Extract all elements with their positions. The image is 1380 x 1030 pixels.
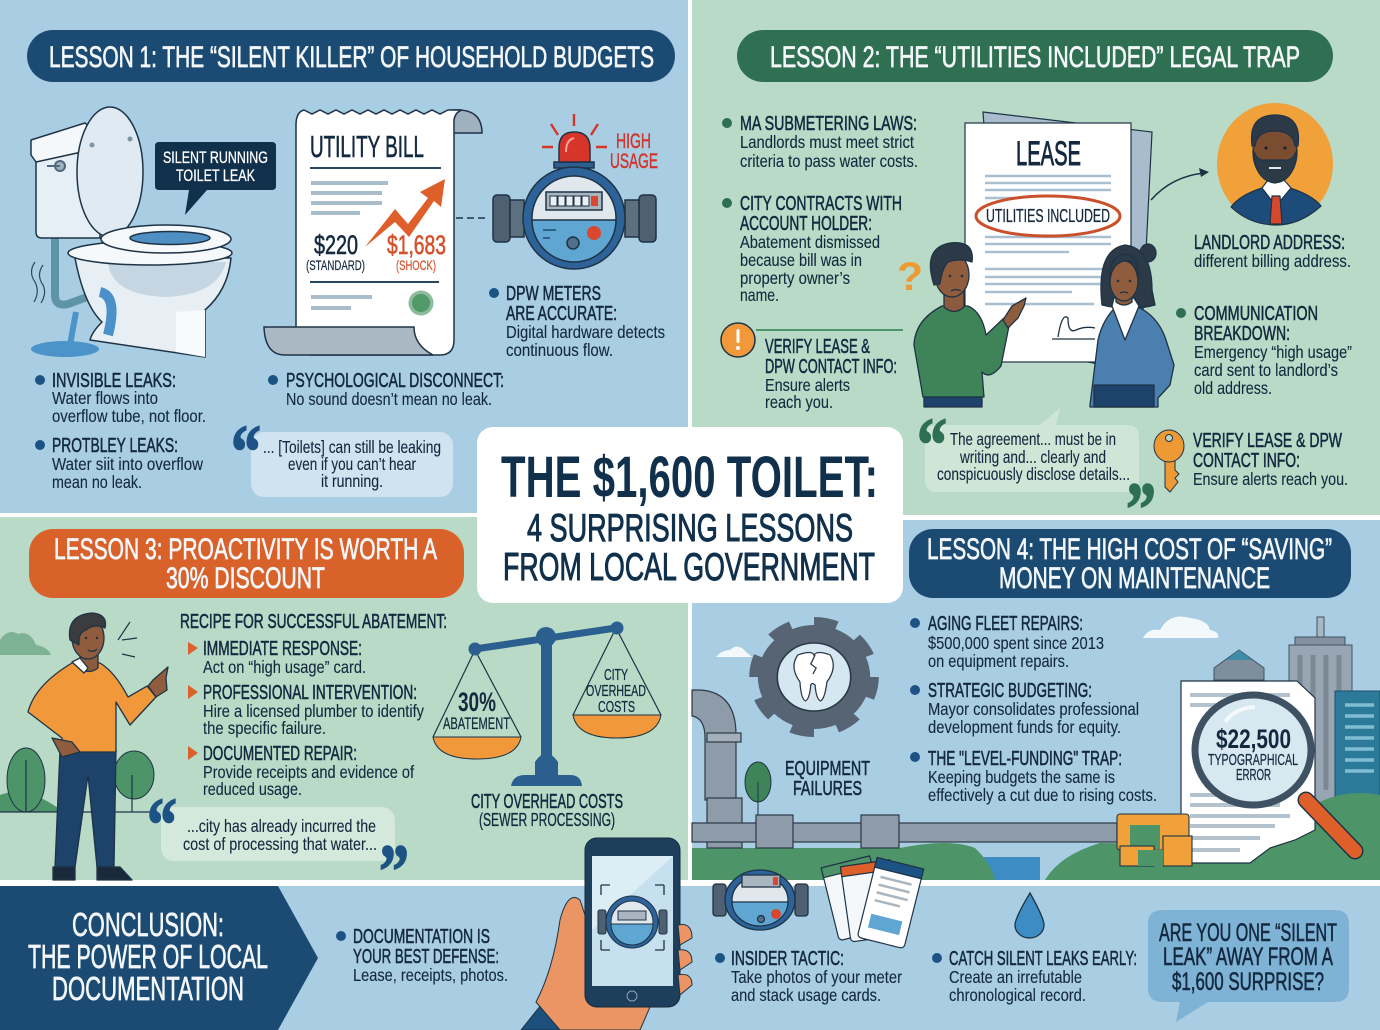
quote: agreement: “ [917, 403, 947, 487]
text: DPW meters: DPW METERS [506, 282, 601, 305]
icon: green seal [408, 290, 434, 316]
shock bill amount: $1,683 [387, 230, 446, 260]
text: strategic budgeting [910, 679, 1139, 737]
icon: woman in blue [1090, 244, 1174, 407]
title card [477, 427, 903, 603]
icon: question mark: ? [897, 255, 923, 299]
label: equipment failures [785, 757, 870, 800]
magnifier text: ERROR [1236, 767, 1271, 784]
text: catch silent leaks: chronological record. [949, 985, 1086, 1005]
text: verify lease left: Ensure alerts [765, 375, 850, 395]
lease title: LEASE [1016, 135, 1081, 173]
icon: water meter with alarm [493, 114, 656, 269]
text: documentation is your best defense [336, 925, 508, 985]
label: equipment failures: FAILURES [793, 777, 862, 800]
shock label: (SHOCK) [396, 257, 436, 273]
text: communication breakdown: old address. [1194, 378, 1272, 398]
text: documented repair: DOCUMENTED REPAIR: [203, 742, 357, 765]
standard label: (STANDARD) [306, 257, 365, 273]
subtitle: 4 SURPRISING LESSONS [527, 507, 853, 550]
quote: agreement: The agreement... must be in [950, 429, 1116, 449]
panel: lesson 1 [0, 0, 688, 513]
text: city contracts: Abatement dismissed [740, 232, 880, 252]
text: city contracts: name. [740, 285, 779, 305]
text: MA submetering laws: Landlords must meet strict [740, 132, 914, 152]
text: DPW meters: ARE ACCURATE: [506, 302, 617, 325]
text: aging fleet repairs: AGING FLEET REPAIRS: [928, 612, 1083, 635]
main title: THE $1,600 TOILET: [501, 445, 878, 510]
lesson 3 heading: 30% DISCOUNT [166, 562, 325, 595]
text: landlord address: different billing address. [1194, 251, 1351, 271]
text: strategic budgeting: STRATEGIC BUDGETING: [928, 679, 1092, 702]
highlighted clause: UTILITIES INCLUDED [986, 206, 1110, 226]
text: level funding trap: Keeping budgets the same is [928, 767, 1115, 787]
text: insider tactic: Take photos of your meter [731, 967, 902, 987]
icon: hand holding phone [521, 838, 692, 1030]
text: city contracts: CITY CONTRACTS WITH [740, 192, 902, 215]
conclusion banner: DOCUMENTATION [52, 970, 244, 1007]
text: communication breakdown: BREAKDOWN: [1194, 322, 1290, 345]
arrow: rising bill [365, 179, 445, 247]
panel: lesson 4 [692, 520, 1380, 880]
text: documented repair: reduced usage. [203, 779, 302, 799]
high usage label: HIGH [616, 130, 651, 153]
text: level funding trap: effectively a cut due to rising costs. [928, 785, 1157, 805]
text: communication breakdown: COMMUNICATION [1194, 302, 1318, 325]
subtitle: FROM LOCAL GOVERNMENT [503, 546, 875, 589]
text: verify lease left [765, 335, 897, 412]
icon: leaking toilet [31, 107, 232, 357]
label: equipment failures: EQUIPMENT [785, 757, 870, 780]
panel: lesson 2 [692, 0, 1380, 552]
text: catch silent leaks: Create an irrefutable [949, 967, 1082, 987]
scale label: city overhead [586, 667, 646, 716]
callout: are you one silent leak away [1148, 910, 1349, 1022]
quote: agreement: conspicuously disclose details... [937, 464, 1130, 484]
text: city contracts [722, 192, 902, 305]
text: verify lease left: VERIFY LEASE & [765, 335, 870, 358]
callout: silent running toilet leak: TOILET LEAK [176, 166, 255, 185]
quote: agreement: ” [1126, 468, 1156, 552]
scale label: city overhead: COSTS [598, 699, 635, 716]
text: invisible leaks: Water flows into [52, 388, 158, 408]
text: city contracts: because bill was in [740, 250, 862, 270]
text: professional intervention: Hire a licensed plumber to identify [203, 701, 424, 721]
text: strategic budgeting: development funds for equity. [928, 717, 1121, 737]
text: DPW meters: continuous flow. [506, 340, 613, 360]
lesson 4 heading: MONEY ON MAINTENANCE [999, 562, 1270, 595]
lesson 1 heading: LESSON 1: THE “SILENT KILLER” OF HOUSEHOLD BUDGETS [49, 41, 654, 74]
quote: toilets leaking: it running. [321, 471, 383, 491]
conclusion banner [0, 886, 318, 1030]
panel: conclusion strip [0, 838, 1380, 1030]
scale label: city overhead: OVERHEAD [586, 683, 646, 700]
icon: utility bill [264, 110, 482, 355]
quote: toilets leaking: even if you can’t hear [288, 454, 416, 474]
text: aging fleet repairs [910, 612, 1104, 671]
panel: lesson 3 [0, 517, 688, 914]
icon: landlord portrait [1217, 103, 1333, 225]
text: immediate response [188, 637, 366, 677]
magnifier text: TYPOGRAPHICAL [1208, 752, 1298, 769]
lesson 3 heading: LESSON 3: PROACTIVITY IS WORTH A [54, 533, 437, 566]
text: city overhead costs: (SEWER PROCESSING) [479, 810, 615, 830]
text: aging fleet repairs: $500,000 spent since 2013 [928, 633, 1104, 653]
text: documentation is your best defense: YOUR BEST DEFENSE: [353, 945, 499, 968]
callout: silent running toilet leak: SILENT RUNNING [163, 148, 268, 167]
text: MA submetering laws: MA SUBMETERING LAWS: [740, 112, 917, 135]
conclusion banner: THE POWER OF LOCAL [28, 938, 268, 975]
text: insider tactic: and stack usage cards. [731, 985, 881, 1005]
lesson 3 heading [29, 529, 464, 598]
text: protbley leaks [35, 434, 203, 492]
scale label: abatement [443, 687, 510, 733]
icon: pipes [692, 690, 1117, 848]
quote: toilets leaking: “ [231, 410, 261, 494]
text: verify lease right: Ensure alerts reach you. [1193, 469, 1348, 489]
lesson 4 heading [909, 529, 1351, 598]
text: psychological disconnect: No sound doesn’t mean no leak. [286, 389, 492, 409]
scenery: trees and cloud [0, 632, 154, 812]
scenery: clouds, city and landscape [692, 616, 1380, 880]
text: communication breakdown: card sent to landlord’s [1194, 360, 1338, 380]
scale label: abatement: ABATEMENT [443, 714, 510, 733]
text: psychological disconnect [268, 369, 504, 409]
text: documentation is your best defense: Lease, receipts, photos. [353, 965, 508, 985]
text: DPW meters: Digital hardware detects [506, 322, 665, 342]
icon: water drop [1015, 893, 1044, 938]
text: insider tactic [715, 947, 902, 1005]
text: immediate response: IMMEDIATE RESPONSE: [203, 637, 362, 660]
lesson 2 heading [737, 30, 1333, 82]
text: communication breakdown: Emergency “high usage” [1194, 342, 1352, 362]
text: catch silent leaks [932, 947, 1137, 1005]
text: MA submetering laws [722, 112, 918, 171]
text: city overhead costs [471, 790, 623, 830]
conclusion banner: CONCLUSION: [72, 906, 224, 943]
text: verify lease right [1193, 429, 1348, 489]
text: verify lease left: reach you. [765, 392, 833, 412]
text: documented repair [188, 742, 414, 799]
text: city contracts: property owner’s [740, 268, 850, 288]
text: landlord address [1194, 231, 1351, 271]
text: verify lease left: DPW CONTACT INFO: [765, 355, 897, 378]
icon: confused tenant [914, 243, 1026, 407]
text: city overhead costs: CITY OVERHEAD COSTS [471, 790, 623, 813]
scale label: abatement: 30% [458, 687, 496, 717]
text: city contracts: ACCOUNT HOLDER: [740, 212, 872, 235]
quote: agreement: writing and... clearly and [959, 447, 1106, 467]
text: professional intervention [188, 681, 424, 738]
text: protbley leaks: PROTBLEY LEAKS: [52, 434, 178, 457]
magnifier text: $22,500 [1216, 724, 1291, 754]
icon: document with magnifier [1181, 681, 1355, 863]
text: verify lease right: CONTACT INFO: [1193, 449, 1300, 472]
text: communication breakdown [1176, 302, 1352, 398]
highlighted clause [976, 196, 1120, 236]
icon: key [1154, 430, 1184, 492]
lesson 1 heading [27, 30, 675, 82]
scale label: city overhead: CITY [604, 667, 628, 684]
high usage label: USAGE [610, 150, 658, 173]
text: MA submetering laws: criteria to pass water costs. [740, 151, 918, 171]
callout: silent running toilet leak [155, 142, 276, 215]
text: protbley leaks: Water siit into overflow [52, 454, 203, 474]
text: level funding trap [910, 747, 1157, 805]
icon: money pile [1117, 814, 1192, 866]
magnifier text [1208, 724, 1298, 784]
icon: man pointing [28, 613, 168, 880]
text: level funding trap: THE "LEVEL-FUNDING" TRAP: [928, 747, 1122, 770]
text: professional intervention: PROFESSIONAL INTERVENTION: [203, 681, 417, 704]
text: psychological disconnect: PSYCHOLOGICAL DISCONNECT: [286, 369, 504, 392]
text: strategic budgeting: Mayor consolidates professional [928, 699, 1139, 719]
text: professional intervention: the specific failure. [203, 718, 326, 738]
quote: toilets leaking [231, 410, 453, 497]
text: recipe heading: RECIPE FOR SUCCESSFUL ABATEMENT: [180, 610, 447, 633]
quote: city incurred cost [147, 783, 409, 914]
arrow: to landlord [1151, 168, 1209, 200]
quote: agreement [917, 403, 1156, 552]
text: aging fleet repairs: on equipment repairs. [928, 651, 1069, 671]
icon: gear with cracked tooth [756, 623, 872, 731]
text: invisible leaks: overflow tube, not floor. [52, 406, 206, 426]
quote: city incurred cost: ” [379, 830, 409, 914]
icon: usage cards [821, 856, 924, 949]
quote: city incurred cost: ...city has already incurred the [187, 816, 376, 836]
text: immediate response: Act on “high usage” card. [203, 657, 366, 677]
quote: city incurred cost: cost of processing that water... [183, 834, 377, 854]
subtitle [503, 507, 875, 589]
text: protbley leaks: mean no leak. [52, 472, 142, 492]
text: documentation is your best defense: DOCUMENTATION IS [353, 925, 490, 948]
text: DPW meters [489, 282, 665, 360]
icon: meter [713, 870, 808, 930]
icon: warning [721, 323, 903, 357]
bill title: UTILITY BILL [310, 129, 424, 164]
text: insider tactic: INSIDER TACTIC: [731, 947, 844, 970]
text: invisible leaks [35, 369, 206, 426]
standard bill amount: $220 [314, 230, 358, 260]
text: invisible leaks: INVISIBLE LEAKS: [52, 369, 176, 392]
text: documented repair: Provide receipts and evidence of [203, 762, 414, 782]
high usage label [610, 130, 658, 173]
text: catch silent leaks: CATCH SILENT LEAKS EARLY: [949, 947, 1137, 970]
icon: balance scale [433, 622, 661, 786]
icon: lease document [965, 112, 1152, 372]
quote: toilets leaking: ... [Toilets] can still be leaking [263, 437, 441, 457]
quote: city incurred cost: “ [147, 783, 177, 867]
